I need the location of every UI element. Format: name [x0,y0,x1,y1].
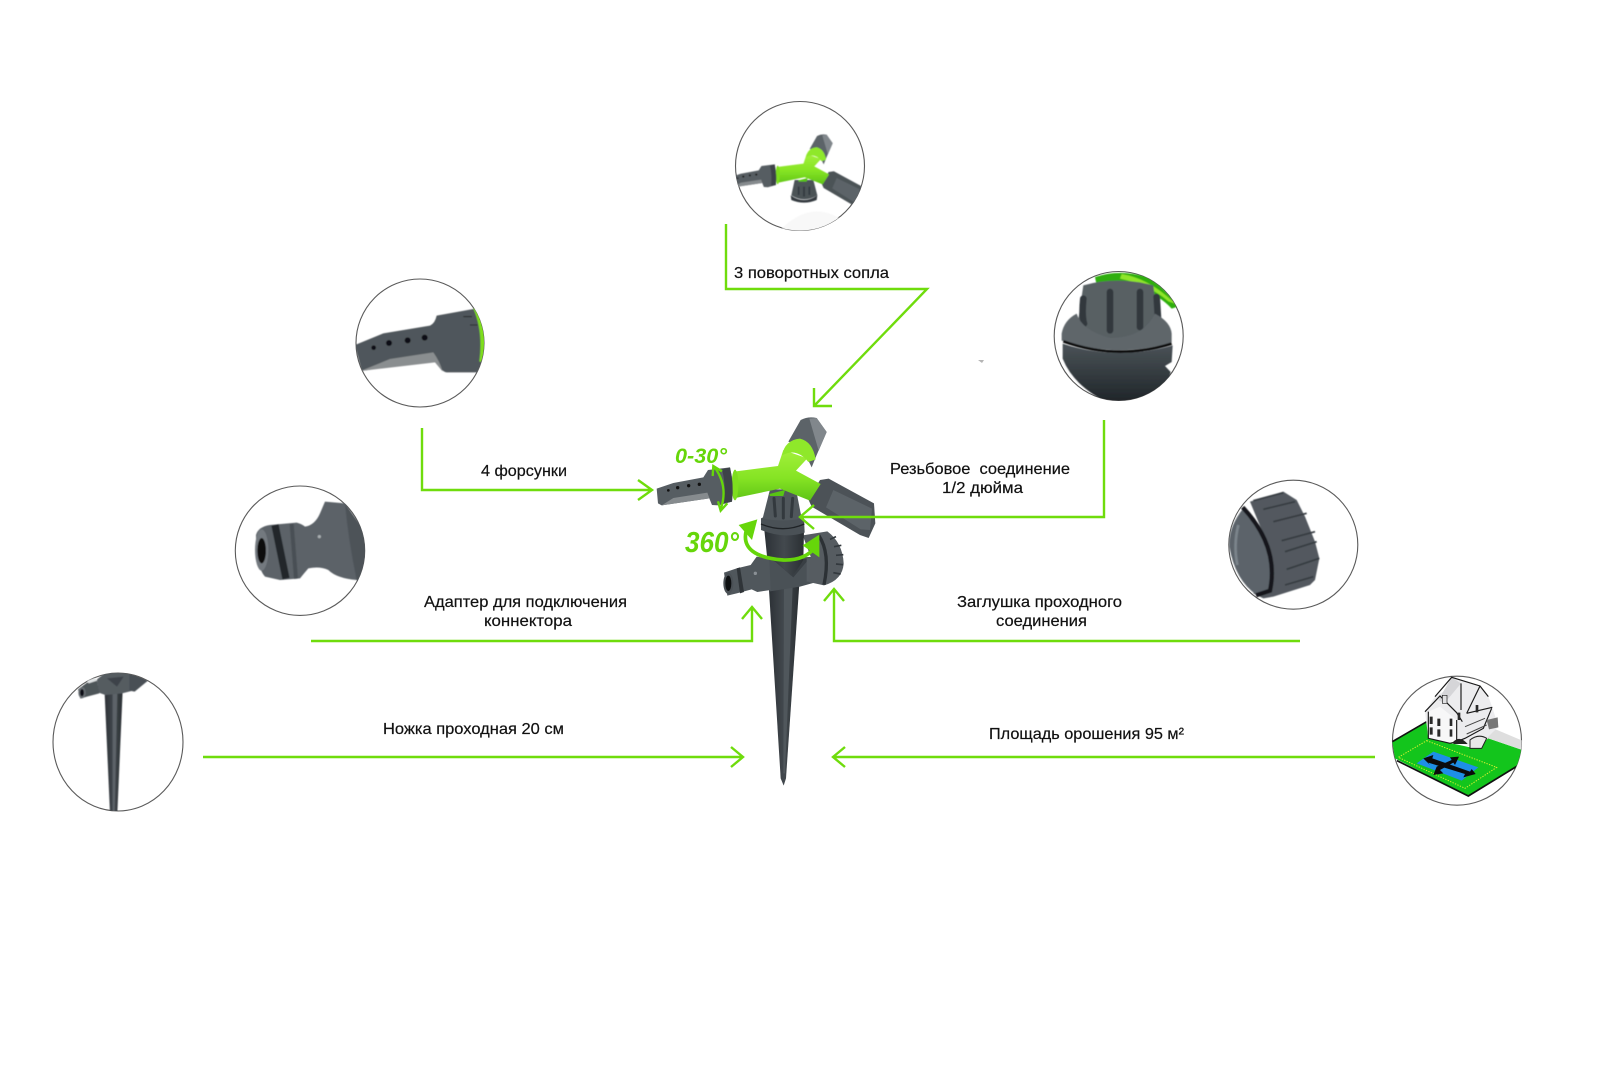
circle outline: irrigated area [1392,676,1522,805]
caption: thread: 1/2 дюйма [942,480,1023,497]
circle: irrigated area [1392,677,1522,796]
connector: three nozzles [726,224,927,406]
product: sprinkler on spike [657,417,875,786]
driveway [1485,729,1522,750]
connector: irrigated area [833,747,1375,767]
hose adapter [723,557,771,596]
rotation arrow [739,519,819,560]
caption: spike: Ножка проходная 20 см [383,721,564,738]
tiny speck [978,360,984,363]
caption: adapter: коннектора [484,613,572,630]
circle outline: jets [356,279,484,407]
caption: three nozzles: 3 поворотных сопла [734,265,889,282]
connector: end cap [824,589,1300,641]
connector: thread [800,420,1104,529]
spike [769,584,799,786]
house [1425,677,1498,748]
left nozzle [657,467,733,505]
label: tilt angle: 0-30° [675,445,728,468]
lawn edges [1392,722,1520,796]
circle outline: spike [53,673,183,811]
caption: end cap: Заглушка проходного [957,594,1122,611]
circle: three nozzles [731,134,862,233]
circle outline: adapter [235,486,365,615]
Y-head with nozzles [657,417,875,538]
connector: jets [422,428,652,500]
circle: jets [355,308,488,372]
connector: adapter [311,607,762,641]
end cap [803,531,844,585]
vertical column [761,489,805,575]
caption: thread: Резьбовое соединение [890,461,1070,478]
caption: thread [890,461,1070,497]
caption: jets: 4 форсунки [481,463,567,480]
circle outline: thread [1054,272,1183,400]
label: rotation angle: 360° [685,527,739,559]
circle outline: end cap [1229,480,1358,609]
circle outline: nozzles [736,102,864,230]
caption: irrigated area: Площадь орошения 95 м² [989,726,1185,743]
caption: end cap [957,594,1122,630]
circle: adapter [254,501,365,581]
circle: end cap [1229,492,1319,598]
circle: spike [78,673,148,813]
caption: adapter: Адаптер для подключения [424,594,627,611]
caption: adapter [424,594,627,630]
green body [732,439,821,501]
top nozzle [788,417,827,467]
tilt arrow [713,466,727,511]
tee body [766,557,822,591]
plot dotted border [1398,741,1497,788]
water area [1417,752,1478,781]
circle: thread [1062,273,1177,402]
connector: spike [203,747,743,767]
caption: end cap: соединения [996,613,1087,630]
right nozzle [808,479,875,538]
direction arrows [1423,755,1476,777]
lawn [1392,722,1522,796]
